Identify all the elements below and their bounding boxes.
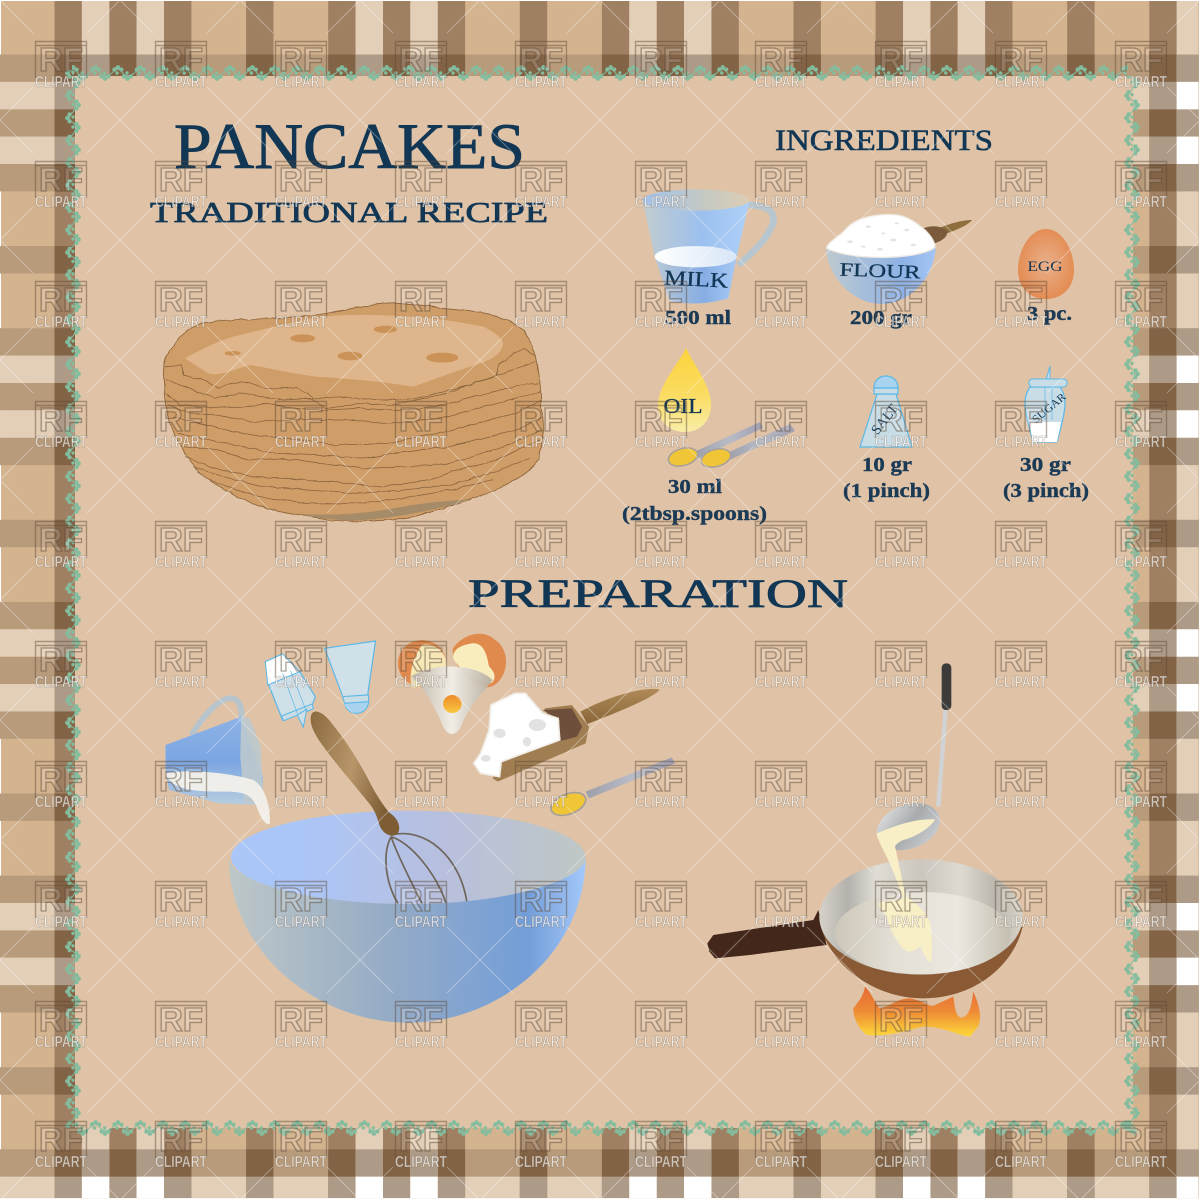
ingredient: oil xyxy=(622,348,795,525)
ingredient: salt: 10 gr xyxy=(862,454,912,476)
mixing scene xyxy=(165,634,675,1023)
mixing bowl body xyxy=(229,857,586,1023)
ingredient: flour: 200 gr xyxy=(850,307,912,329)
pan floor xyxy=(835,892,1011,974)
ingredient: egg: EGG xyxy=(1028,259,1063,275)
ingredient: egg xyxy=(1018,229,1074,325)
pouring milk pitcher xyxy=(165,698,270,824)
whisk xyxy=(311,711,467,903)
flour scoop xyxy=(474,689,660,782)
subtitle: TRADITIONAL RECIPE xyxy=(150,197,548,229)
ingredient: egg: 3 pc. xyxy=(1027,303,1072,325)
ingredient: milk: 500 ml xyxy=(665,307,732,329)
title: PANCAKES xyxy=(174,111,525,183)
ingredient: flour: FLOUR xyxy=(839,260,921,283)
ingredient: sugar: 30 gr xyxy=(1020,454,1071,476)
ingredient: sugar: (3 pinch) xyxy=(1003,480,1089,502)
spoon with oil xyxy=(548,757,675,820)
ingredients heading: INGREDIENTS xyxy=(775,124,993,157)
pan inner wall xyxy=(819,859,1023,975)
pan handle xyxy=(707,910,827,958)
ingredient: salt: (1 pinch) xyxy=(843,480,930,502)
ingredient: salt: SALT xyxy=(869,402,902,438)
pan body xyxy=(819,917,1023,998)
ingredient: sugar xyxy=(1003,366,1089,502)
ingredient: sugar: SUGAR xyxy=(1030,391,1069,426)
falling salt shaker xyxy=(325,641,376,713)
ingredient: oil: 30 ml xyxy=(668,476,723,498)
ingredient: milk: MILK xyxy=(663,265,729,293)
cracked egg xyxy=(398,634,506,734)
ladle xyxy=(870,663,951,859)
ingredient: flour xyxy=(826,215,972,329)
batter xyxy=(877,819,935,962)
falling sugar jar xyxy=(265,654,315,727)
ingredient: salt xyxy=(843,376,930,502)
panel: recipe card xyxy=(75,76,1133,1128)
ingredient: milk xyxy=(643,189,774,329)
pancake stack illustration xyxy=(163,303,543,521)
spoon one xyxy=(666,422,763,469)
spoon two xyxy=(699,424,795,470)
frying scene xyxy=(707,663,1023,1037)
mixing bowl rim xyxy=(231,811,586,904)
preparation heading: PREPARATION xyxy=(468,571,848,616)
decorative vine border xyxy=(65,65,1140,1136)
ingredient: oil: (2tbsp.spoons) xyxy=(622,503,767,525)
flame xyxy=(853,987,980,1037)
ingredient: oil: OIL xyxy=(664,394,702,418)
